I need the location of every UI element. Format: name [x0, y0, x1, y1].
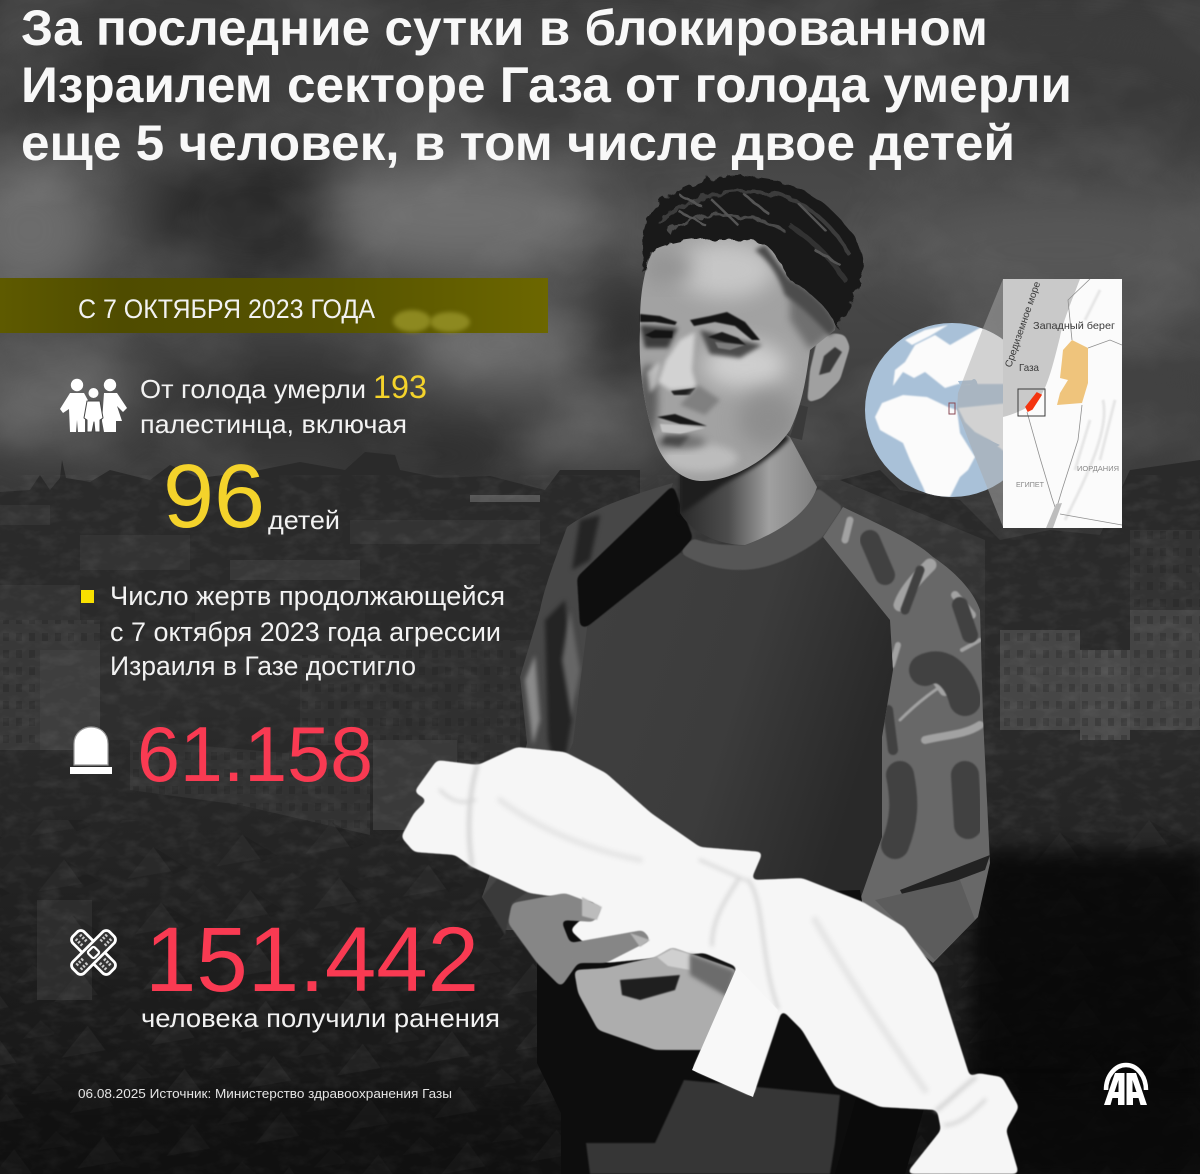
hair	[642, 176, 863, 328]
shrouded child	[401, 747, 1019, 1174]
eyebrows	[640, 312, 760, 340]
Gaza locator box	[1018, 389, 1045, 416]
date band label: С 7 ОКТЯБРЯ 2023 ГОДА	[78, 294, 375, 324]
Gaza strip	[1026, 393, 1041, 411]
source note: 06.08.2025 Источник: Министерство здравоохранения Газы	[78, 1086, 452, 1101]
map panel	[1003, 279, 1122, 528]
yellow date band	[0, 278, 548, 333]
upper hand	[508, 893, 651, 987]
stat: 96 children: 96	[163, 447, 265, 547]
nose	[658, 332, 697, 390]
city left skyline	[0, 452, 640, 640]
text: death toll intro: Число жертв продолжающейся	[110, 581, 505, 611]
stat: died of hunger: 193	[373, 369, 427, 405]
collar	[680, 487, 843, 570]
hanging shroud flap	[692, 967, 778, 1097]
locator map	[860, 279, 1122, 528]
stat: 96 children: детей	[268, 505, 340, 535]
globe land	[874, 324, 1003, 497]
torso	[560, 537, 893, 905]
stat: wounded: человека получили ранения	[141, 1003, 500, 1033]
icon: Anadolu Agency logo	[1104, 1065, 1147, 1105]
map labels: Западный берег	[1033, 320, 1115, 332]
stat: died of hunger: От голода умерли	[140, 374, 366, 404]
face	[640, 235, 838, 481]
text: death toll intro: Израиля в Газе достигло	[110, 651, 416, 681]
title: За последние сутки в блокированном	[21, 0, 988, 56]
city right	[840, 460, 1200, 760]
stat: wounded: 151.442	[145, 909, 479, 1011]
map labels: ИОРДАНИЯ	[1077, 464, 1119, 473]
stat: died of hunger: палестинца, включая	[140, 409, 407, 439]
stat: died of hunger	[140, 369, 427, 439]
ear	[807, 333, 850, 403]
text: death toll intro	[110, 581, 505, 681]
icon: family	[60, 379, 127, 432]
shroud folds	[440, 766, 985, 1125]
West Bank	[1057, 340, 1088, 405]
smoke clouds	[0, 35, 1200, 475]
right camouflage sleeve	[823, 507, 990, 963]
left elbow	[482, 870, 530, 935]
title	[21, 0, 1072, 171]
person holding shrouded child	[401, 176, 1019, 1174]
map labels: ЕГИПЕТ	[1016, 480, 1044, 489]
yellow bullet	[81, 590, 94, 603]
map labels: Средиземное море	[1003, 280, 1043, 369]
text: death toll intro: с 7 октября 2023 года агрессии	[110, 617, 501, 647]
stat: killed: 61.158	[137, 710, 373, 798]
icon: crossed bandages	[57, 916, 130, 989]
magnifier beam	[957, 279, 1003, 527]
title: Израилем секторе Газа от голода умерли	[21, 57, 1072, 113]
title: еще 5 человек, в том числе двое детей	[21, 115, 1015, 171]
globe	[865, 323, 1003, 497]
stat: 96 children	[163, 447, 340, 547]
globe locator box	[949, 403, 955, 414]
left sleeve	[482, 483, 673, 930]
black shoulder shadow	[577, 485, 693, 627]
icon: gravestone	[70, 727, 112, 774]
map labels	[1003, 280, 1119, 489]
buildings mid left	[0, 620, 100, 750]
lower sweater and trousers	[537, 890, 880, 1174]
debris tents	[0, 820, 1200, 1174]
hair fade	[755, 245, 837, 336]
map labels: Газа	[1019, 362, 1039, 374]
lower hand	[574, 947, 737, 1050]
eyes	[645, 330, 746, 350]
neck	[680, 430, 817, 545]
mouth	[657, 414, 707, 426]
